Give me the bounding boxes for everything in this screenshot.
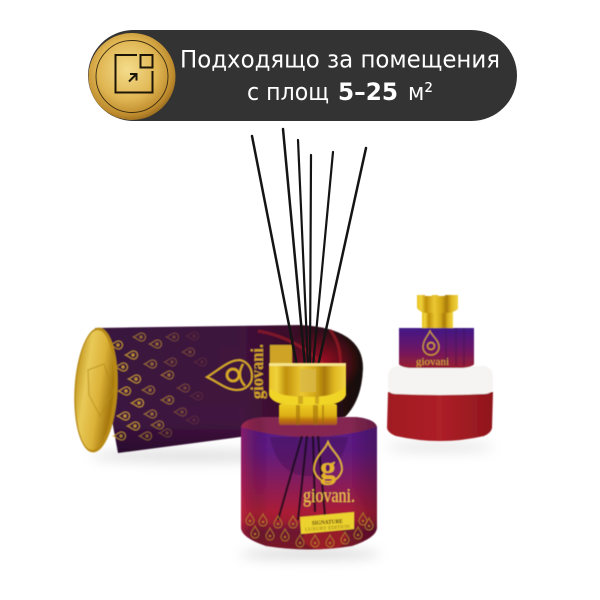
icon: gold coin with resize symbol [88, 33, 176, 120]
badge text: Подходящо за помещения [180, 46, 500, 74]
badge text: 5–25 [338, 78, 398, 106]
gift tube [71, 325, 363, 454]
bottle brand name: giovani. [303, 485, 355, 507]
reed sticks [252, 129, 366, 366]
red base [387, 392, 493, 441]
jar gold cap [417, 295, 458, 328]
bottle logo: g [320, 449, 336, 485]
bottle glass [241, 417, 377, 553]
red swirl [258, 330, 362, 395]
tube gold end [71, 326, 121, 454]
bottle logo [314, 442, 342, 485]
purple jar: giovani [416, 356, 449, 368]
inner dark tube [270, 437, 348, 476]
bottle label: SIGNATURE [312, 519, 343, 527]
white lid rim [388, 366, 493, 395]
badge text [180, 46, 500, 106]
bottle neck [279, 404, 337, 425]
diffuser bottle [241, 363, 377, 553]
badge text: м² [408, 78, 433, 106]
purple jar [399, 328, 474, 368]
tube brand name: giovani. [247, 344, 267, 399]
bottle label [300, 512, 354, 534]
drop pattern [110, 332, 206, 440]
bottle gold cap [269, 363, 346, 405]
floor shadows [90, 442, 495, 559]
red patch [302, 530, 348, 550]
bottle label: LUXURY EDITION [305, 525, 351, 533]
tube gold label [270, 345, 292, 367]
tube logo [207, 360, 252, 390]
tube body [95, 325, 363, 453]
badge text: с площ [247, 78, 329, 106]
bottle top surface [241, 417, 377, 437]
sticks inside [278, 436, 325, 520]
bottle drop pattern [246, 513, 373, 547]
badge pill [88, 30, 517, 121]
small jar [387, 295, 493, 441]
